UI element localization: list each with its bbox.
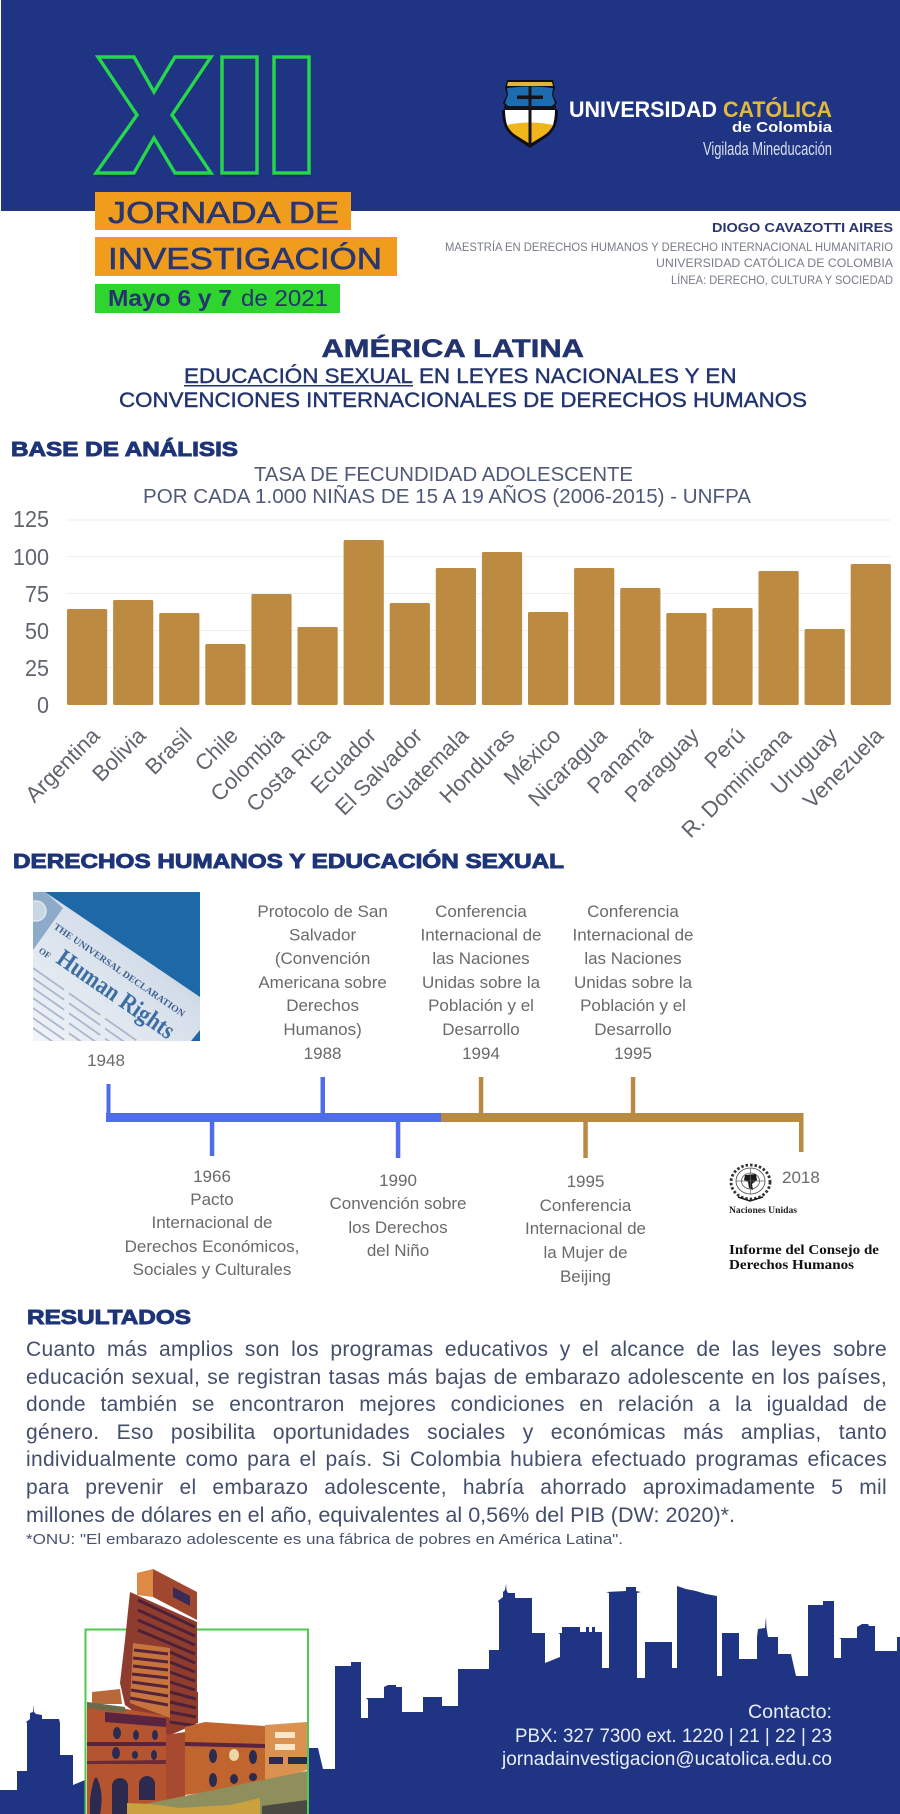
bar chart: teen fertility rate: 100 — [13, 544, 49, 570]
university wordmark: UNIVERSIDAD — [569, 97, 717, 122]
author block — [445, 220, 893, 287]
timeline — [106, 1077, 804, 1158]
icon: university shield — [502, 80, 558, 148]
bar chart: teen fertility rate: R. Dominicana — [676, 722, 797, 843]
contact details: jornadainvestigacion@ucatolica.edu.co — [501, 1749, 832, 1770]
timeline event 1990: los Derechos — [348, 1218, 448, 1237]
chart title: TASA DE FECUNDIDAD ADOLESCENTE — [254, 464, 633, 486]
event numeral XII — [96, 57, 310, 176]
contact details: PBX: 327 7300 ext. 1220 | 21 | 22 | 23 — [515, 1726, 832, 1747]
bar chart: teen fertility rate: Brasil — [140, 723, 197, 779]
timeline event 1966: 1966 — [193, 1167, 231, 1186]
university wordmark: de Colombia — [732, 119, 833, 136]
event title: INVESTIGACIÓN: INVESTIGACIÓN — [108, 241, 382, 276]
timeline event 1995 upper: las Naciones — [584, 949, 682, 968]
bar chart: teen fertility rate: El Salvador — [330, 723, 427, 820]
bar chart: teen fertility rate: Costa Rica — [241, 722, 336, 817]
bar chart: teen fertility rate: Nicaragua — [523, 722, 612, 811]
timeline event 1995 upper: Unidas sobre la — [574, 973, 693, 992]
timeline event 1948: 1948 — [87, 1051, 125, 1070]
timeline event 1994: 1994 — [462, 1044, 500, 1063]
timeline event 1995 lower: Conferencia — [540, 1196, 632, 1215]
timeline event 1994: Desarrollo — [442, 1020, 520, 1039]
timeline event 1988: (Convención — [275, 949, 370, 968]
bar chart: teen fertility rate: 0 — [37, 692, 49, 718]
timeline event 1988: Derechos — [286, 996, 359, 1015]
bar chart: teen fertility rate: 50 — [25, 618, 49, 644]
contact details: Contacto: — [748, 1702, 832, 1723]
results paragraph: donde también se encontraron mejores condiciones en relación a la igualdad de — [26, 1393, 887, 1416]
results paragraph: Cuanto más amplios son los programas educativos y el alcance de las leyes sobre — [26, 1338, 887, 1361]
heading: resultados: RESULTADOS — [27, 1307, 191, 1329]
timeline event 1994: Población y el — [428, 996, 534, 1015]
timeline event 1990: del Niño — [367, 1241, 429, 1260]
university wordmark — [569, 97, 833, 159]
author block: MAESTRÍA EN DERECHOS HUMANOS Y DERECHO INTERNACIONAL HUMANITARIO — [445, 241, 893, 254]
author block: DIOGO CAVAZOTTI AIRES — [712, 220, 893, 235]
chart title: POR CADA 1.000 NIÑAS DE 15 A 19 AÑOS (2006-2015) - UNFPA — [143, 484, 752, 508]
timeline event 1995 upper: 1995 — [614, 1044, 652, 1063]
image: universal declaration of human rights document: OF — [37, 945, 53, 961]
footnote: *ONU: "El embarazo adolescente es una fábrica de pobres en América Latina". — [26, 1531, 623, 1548]
main title — [119, 334, 807, 412]
event title: JORNADA DE: JORNADA DE — [108, 195, 339, 230]
contact details — [501, 1702, 832, 1770]
event date — [95, 284, 340, 313]
timeline event 1966: Derechos Económicos, — [125, 1237, 299, 1256]
bar chart: teen fertility rate: Argentina — [20, 722, 105, 807]
timeline event 1995 upper: Conferencia — [587, 902, 679, 921]
report caption — [729, 1243, 879, 1273]
bar chart: teen fertility rate: 75 — [25, 581, 49, 607]
main title: EDUCACIÓN SEXUAL — [184, 365, 413, 388]
bar chart: teen fertility rate: Panamá — [582, 722, 658, 798]
bar chart: teen fertility rate: Perú — [699, 723, 750, 773]
university wordmark: Vigilada Mineducación — [703, 139, 832, 159]
united nations caption: Naciones Unidas — [729, 1206, 797, 1216]
timeline event 1994: Unidas sobre la — [422, 973, 541, 992]
results paragraph last line: millones de dólares en el año, equivalentes al 0,56% del PIB (DW: 2020)*. — [26, 1504, 735, 1527]
timeline event 1995 lower: Beijing — [560, 1267, 611, 1286]
bar chart: teen fertility rate: 125 — [13, 506, 49, 532]
author block: UNIVERSIDAD CATÓLICA DE COLOMBIA — [656, 257, 893, 270]
bar chart: teen fertility rate: Honduras — [434, 723, 519, 808]
image: universal declaration of human rights document: THE UNIVERSAL DECLARATION — [51, 922, 186, 1020]
main title: EN LEYES NACIONALES Y EN — [419, 365, 736, 388]
results paragraph — [26, 1338, 887, 1498]
event date: de 2021 — [241, 285, 328, 311]
heading: base de análisis: BASE DE ANÁLISIS — [11, 438, 238, 461]
event date: Mayo 6 y 7 — [108, 285, 232, 311]
timeline event 1995 lower: 1995 — [567, 1172, 604, 1191]
bar chart: teen fertility rate: Paraguay — [620, 723, 704, 807]
results paragraph: individualmente como para el país. Si Colombia hubiera efectuado programas eficaces — [26, 1448, 887, 1471]
timeline event 1995 upper: Desarrollo — [594, 1020, 672, 1039]
timeline event 1988: 1988 — [304, 1044, 342, 1063]
bar chart: teen fertility rate: Colombia — [206, 722, 289, 806]
timeline event 1988: Americana sobre — [258, 973, 387, 992]
timeline event 1988: Protocolo de San — [257, 902, 388, 921]
city skyline — [0, 1584, 900, 1814]
timeline event 1994: Conferencia — [435, 902, 527, 921]
university wordmark: CATÓLICA — [723, 97, 832, 122]
bar chart: teen fertility rate: Guatemala — [380, 722, 474, 817]
timeline event 1988: Humanos) — [283, 1020, 362, 1039]
bar chart: teen fertility rate: México — [499, 723, 566, 790]
icon: united nations emblem — [731, 1165, 770, 1201]
results paragraph: educación sexual, se registran tasas más bajas de embarazo adolescente en los países, — [26, 1366, 887, 1388]
report caption: Informe del Consejo de — [729, 1243, 879, 1258]
timeline event 1995 upper: Población y el — [580, 996, 686, 1015]
timeline event 1990: 1990 — [379, 1171, 417, 1190]
timeline event 1995 lower: Internacional de — [525, 1219, 646, 1238]
chart title — [143, 464, 752, 508]
bar chart: teen fertility rate — [13, 506, 891, 843]
main title: CONVENCIONES INTERNACIONALES DE DERECHOS HUMANOS — [119, 389, 807, 412]
bar chart: teen fertility rate: Uruguay — [766, 723, 842, 799]
building illustration — [87, 1569, 307, 1814]
image: universal declaration of human rights document — [33, 892, 200, 1041]
bar chart: teen fertility rate: 25 — [25, 655, 49, 681]
timeline event 2018: 2018 — [782, 1168, 820, 1187]
bar chart: teen fertility rate: Venezuela — [798, 722, 889, 813]
timeline event 1966: Sociales y Culturales — [133, 1260, 291, 1279]
timeline event 1966: Internacional de — [152, 1213, 272, 1232]
timeline event 1988: Salvador — [289, 926, 356, 944]
bar chart: teen fertility rate: Bolivia — [87, 722, 151, 786]
author block: LÍNEA: DERECHO, CULTURA Y SOCIEDAD — [671, 274, 893, 287]
results paragraph: para prevenir el embarazo adolescente, habría ahorrado aproximadamente 5 mil — [26, 1476, 887, 1498]
timeline event 1966: Pacto — [190, 1190, 234, 1209]
timeline event 1994: Internacional de — [421, 926, 541, 944]
main title: AMÉRICA LATINA — [322, 334, 584, 363]
building picture frame — [86, 1630, 308, 1814]
timeline event 1990: Convención sobre — [329, 1194, 467, 1213]
heading: derechos humanos y educación sexual: DERECHOS HUMANOS Y EDUCACIÓN SEXUAL — [13, 849, 564, 873]
report caption: Derechos Humanos — [729, 1258, 855, 1273]
results paragraph: género. Eso posibilita oportunidades sociales y económicas más amplias, tanto — [26, 1420, 887, 1444]
header band — [1, 0, 900, 211]
bar chart: teen fertility rate: Chile — [190, 723, 243, 776]
bar chart: teen fertility rate: Ecuador — [306, 723, 381, 798]
image: universal declaration of human rights document: Human Rights — [52, 945, 180, 1045]
timeline event 1995 upper: Internacional de — [573, 926, 693, 944]
timeline event 1994: las Naciones — [432, 949, 530, 968]
timeline event 1995 lower: la Mujer de — [543, 1243, 628, 1262]
